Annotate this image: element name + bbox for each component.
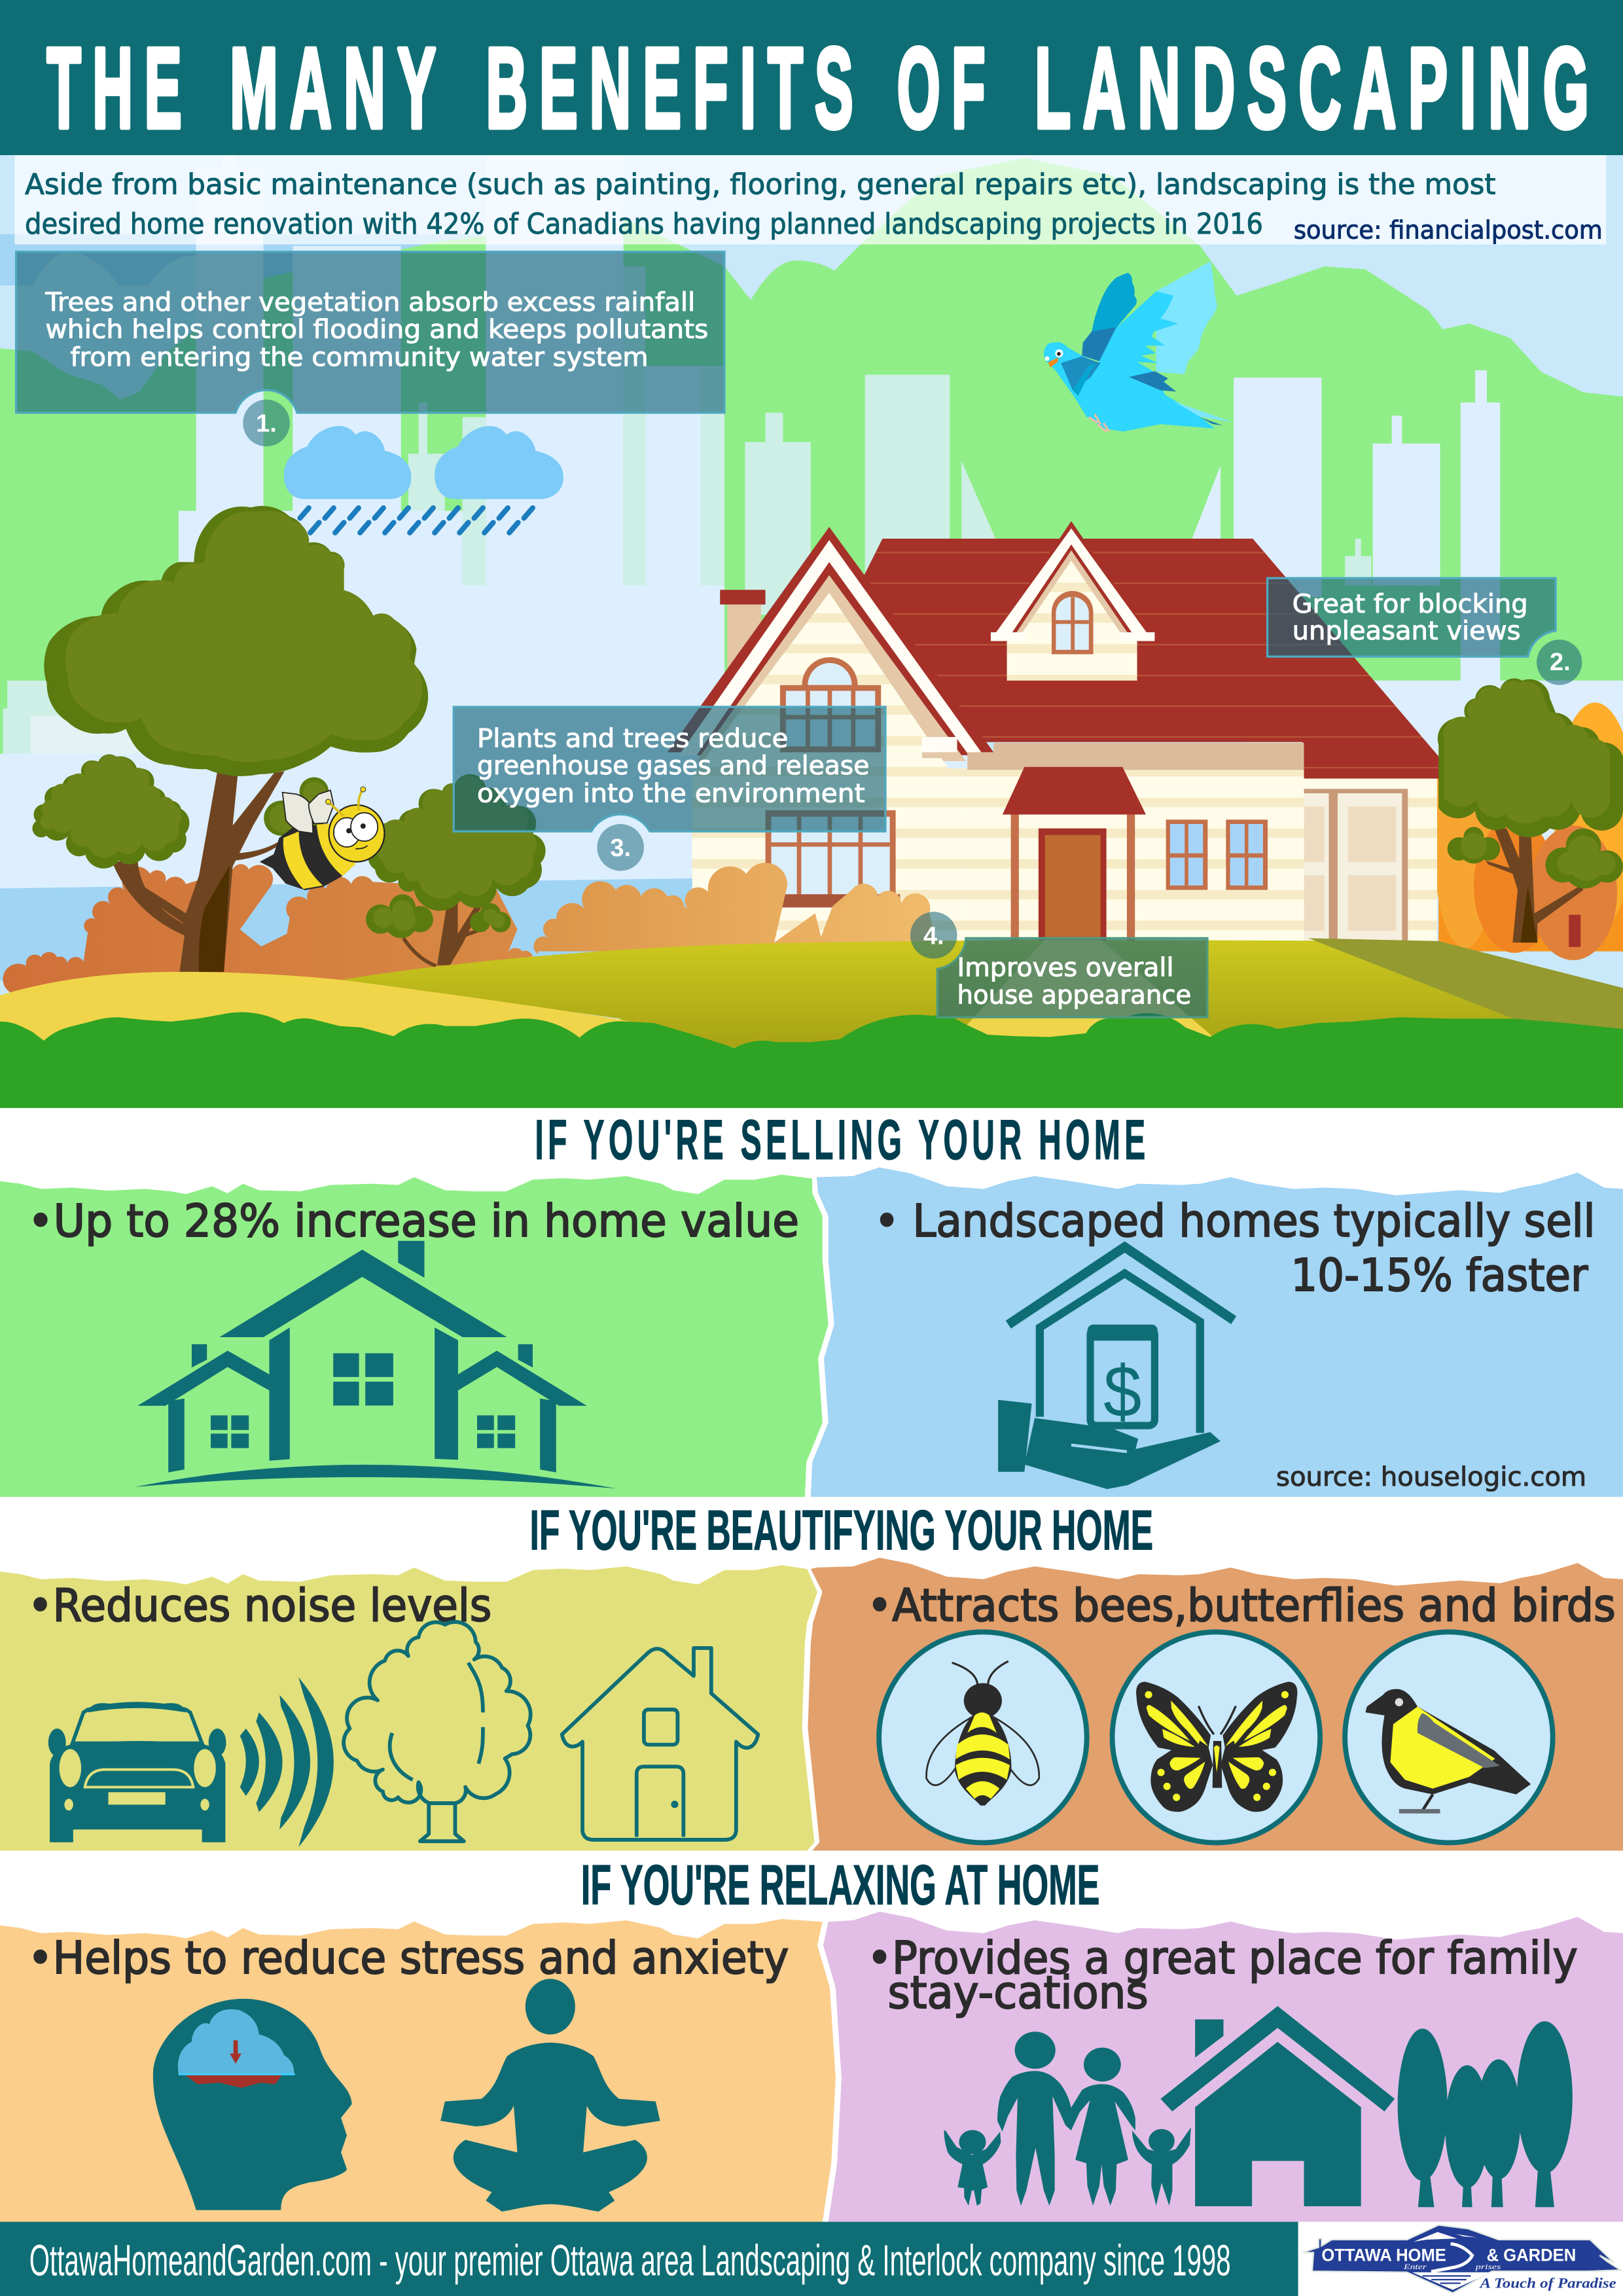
callout 3: greenhouse gases: Plants and trees reduce	[477, 724, 788, 753]
clouds	[284, 426, 563, 499]
icon: car	[48, 1703, 226, 1842]
badge 3	[597, 824, 644, 871]
small tree left	[32, 754, 189, 937]
green hills	[0, 158, 1623, 754]
callout 4: house appearance	[910, 912, 1207, 1017]
text: home value: •Up to 28% increase in home value	[27, 1196, 799, 1247]
text: sell faster: 10-15% faster	[1291, 1250, 1588, 1302]
panel: pollinators	[808, 1558, 1623, 1851]
orange bushes left	[3, 864, 533, 1010]
icon: trees	[1398, 2021, 1573, 2207]
badge 2	[1537, 639, 1582, 685]
logo: Ottawa Home & Garden: OTTAWA HOME	[1321, 2246, 1446, 2265]
logo: Ottawa Home & Garden: Enter	[1403, 2263, 1427, 2271]
source: financialpost.com: source: financialpost.com	[1294, 216, 1603, 245]
badge 1	[243, 399, 290, 446]
heading: beautifying: IF YOU'RE BEAUTIFYING YOUR HOME	[530, 1499, 1153, 1562]
text: stay-cations	[867, 1933, 1578, 2019]
icon: bird badge	[1345, 1632, 1553, 1842]
callout 1: rainfall: which helps control flooding and keeps pollutants	[45, 315, 708, 345]
title: THE	[47, 24, 193, 152]
lower bay window	[761, 810, 900, 907]
panel: stay-cations	[823, 1912, 1623, 2222]
small tree right	[366, 774, 546, 966]
intro band	[14, 155, 1606, 245]
right wings	[1221, 1681, 1297, 1812]
left wings	[1136, 1681, 1213, 1812]
text: stay-cations: •Provides a great place for family	[867, 1933, 1578, 1984]
large tree	[44, 506, 428, 972]
text: stay-cations: stay-cations	[888, 1967, 1149, 2019]
orange autumn trees	[1433, 702, 1623, 960]
callout 4: house appearance: house appearance	[957, 980, 1191, 1010]
callout 3: greenhouse gases: greenhouse gases and release	[477, 751, 869, 781]
icon: blue bird	[1044, 261, 1232, 432]
main roof	[863, 539, 1457, 779]
callout 2: blocking views	[1268, 578, 1582, 685]
icon: bee badge	[879, 1632, 1087, 1842]
chimney	[720, 590, 766, 676]
icon: cartoon bee	[260, 777, 384, 890]
footer bar	[0, 2222, 1298, 2296]
intro text: desired home renovation with 42% of Canadians having planned landscaping projects in 2016	[25, 208, 1263, 241]
callout 1: rainfall	[16, 252, 724, 446]
title: MANY	[230, 24, 448, 152]
title	[47, 24, 1601, 152]
icon: hand holding house	[998, 1247, 1234, 1489]
intro text	[25, 169, 1495, 241]
heading: selling: IF YOU'RE SELLING YOUR HOME	[535, 1109, 1150, 1172]
city skyline	[0, 155, 1623, 907]
callout 1: rainfall: Trees and other vegetation absorb excess rainfall	[45, 288, 695, 317]
icon: house outline	[562, 1648, 758, 1840]
panel: stress	[0, 1919, 836, 2222]
text: sell faster	[874, 1196, 1596, 1302]
badge 4	[910, 912, 957, 959]
header bar	[0, 0, 1623, 155]
orange bushes by house	[533, 863, 938, 954]
icon: family	[944, 2032, 1191, 2206]
icon: tree outline	[344, 1622, 531, 1841]
callout 4: house appearance: Improves overall	[957, 954, 1173, 983]
garage extension	[1304, 779, 1437, 941]
grass hedge	[0, 1013, 1623, 1108]
panel: hero landscape scene	[0, 155, 1623, 1108]
intro text: Aside from basic maintenance (such as painting, flooring, general repairs etc), landscaping is the most	[25, 169, 1495, 202]
badge 3: 3.	[610, 834, 631, 862]
right tree	[1438, 678, 1623, 942]
logo: Ottawa Home & Garden	[1302, 2225, 1620, 2293]
badge 2: 2.	[1550, 649, 1571, 676]
icon: house silhouette	[1160, 2006, 1395, 2206]
logo: Ottawa Home & Garden: prises	[1474, 2263, 1501, 2271]
ground hills	[0, 938, 1623, 1054]
left gable wall and trim	[668, 527, 993, 941]
icon: head with cloud	[153, 1999, 352, 2210]
source: houselogic.com: source: houselogic.com	[1276, 1462, 1586, 1492]
icon: butterfly badge	[1113, 1632, 1320, 1842]
panel: sell faster	[811, 1168, 1623, 1497]
panel: noise	[0, 1565, 817, 1851]
text: noise: •Reduces noise levels	[27, 1580, 491, 1632]
icon: house group	[135, 1241, 616, 1488]
title: OF	[897, 24, 997, 152]
icon: sound waves	[240, 1677, 334, 1847]
title: BENEFITS	[486, 24, 865, 152]
callout 2: blocking views: unpleasant views	[1293, 617, 1520, 646]
water strip	[0, 878, 702, 980]
heading: relaxing: IF YOU'RE RELAXING AT HOME	[581, 1854, 1100, 1916]
porch	[1003, 767, 1146, 941]
logo: Ottawa Home & Garden: A Touch of Paradise	[1478, 2274, 1616, 2291]
text: sell faster: • Landscaped homes typically sell	[874, 1196, 1596, 1247]
callout 2: blocking views: Great for blocking	[1293, 590, 1528, 619]
rain	[300, 508, 533, 533]
front wall	[967, 768, 1304, 941]
callout 1: rainfall: from entering the community water system	[70, 343, 649, 372]
badge 4: 4.	[923, 922, 944, 950]
callout 3: greenhouse gases	[454, 707, 885, 871]
callout 3: greenhouse gases: oxygen into the environment	[477, 779, 865, 808]
logo: Ottawa Home & Garden: & GARDEN	[1487, 2246, 1576, 2265]
front windows	[1166, 819, 1268, 890]
icon: meditating person	[440, 1979, 660, 2212]
icon: hand holding house: $	[1103, 1351, 1141, 1433]
text: stress: •Helps to reduce stress and anxiety	[27, 1933, 789, 1984]
panel: home value	[0, 1175, 829, 1497]
badge 1: 1.	[256, 410, 277, 438]
dormer	[991, 521, 1154, 681]
house	[668, 521, 1457, 941]
gable arched window	[780, 657, 881, 752]
